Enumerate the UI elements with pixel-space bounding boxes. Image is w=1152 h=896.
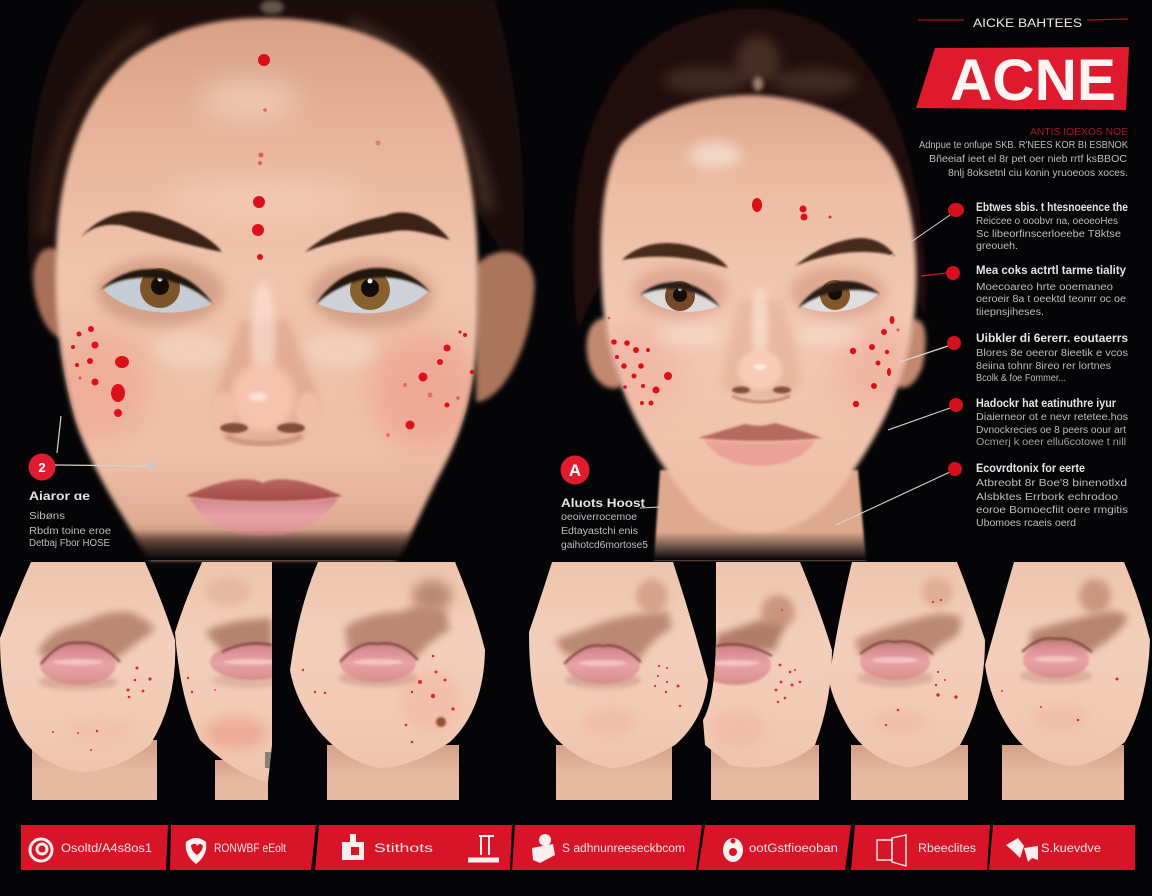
segment: cause 5	[698, 825, 851, 870]
text 1: greoueh.	[976, 241, 1018, 252]
pointer 1	[882, 203, 964, 262]
large face portrait, right	[573, 9, 926, 560]
label 6: Rbeeclites	[918, 843, 976, 855]
text 2: oeroeir 8a t oeektd teonrr oc oe	[976, 294, 1126, 305]
callout text: gaihotcd6mortose5	[561, 540, 648, 551]
leader line	[55, 416, 148, 466]
text 4: Diaierneor ot e nevr retetee.hos	[976, 412, 1128, 423]
pointer 5	[836, 462, 962, 525]
icon: map	[1006, 838, 1038, 862]
intro text block	[919, 126, 1128, 179]
text 5: Ecovrdtonix for eerte	[976, 463, 1085, 475]
intro text block: ANTIS IOEXOS NOE	[1030, 126, 1128, 138]
title banner: ACNE: ACNE	[950, 48, 1116, 113]
segment: cause 6	[851, 825, 990, 870]
callout text: oeoiverrocemoe	[561, 512, 637, 523]
icon: jar	[342, 834, 364, 860]
eyebrows, left portrait	[80, 212, 450, 252]
callout text: Aluots Hoost	[561, 498, 645, 510]
lower-face close-up 6	[829, 562, 985, 800]
label 1: Osoltd/A4s8os1	[61, 843, 152, 855]
annotation 2	[921, 265, 1127, 318]
callout text	[561, 498, 660, 551]
icon: swirl	[30, 839, 52, 861]
segment: cause 3	[315, 825, 512, 870]
hair, left portrait	[28, 0, 524, 285]
callout text: Aiaror ɑe	[29, 491, 90, 503]
text 4: Hadockr hat eatinuthre iyur	[976, 398, 1116, 410]
label 2: RONWBF eEolt	[214, 843, 287, 855]
leader endpoint	[147, 462, 155, 470]
text 3: Blores 8e oeeror 8ieetik e vcos	[976, 348, 1128, 359]
lower-face close-up 1	[0, 562, 175, 800]
large face portrait, left	[28, 0, 535, 560]
face shading, right portrait	[600, 142, 915, 410]
bottom fade, left portrait	[60, 530, 480, 560]
nose, right portrait	[722, 287, 800, 402]
annotation 5	[836, 462, 1128, 529]
text 2	[976, 265, 1127, 318]
text 1	[976, 202, 1128, 252]
callout marker A	[28, 454, 56, 480]
callout: right portrait	[560, 456, 660, 551]
lips, left portrait	[186, 479, 342, 536]
lower-face close-up 4	[529, 562, 708, 800]
icon: person	[532, 834, 555, 863]
face skin, right portrait	[601, 95, 916, 533]
label 3: Stithots	[374, 843, 433, 855]
text 2: Mea coks actrtl tarme tiality	[976, 265, 1127, 277]
text 3: Uibkler di 6ererr. eoutaerrs	[976, 333, 1128, 345]
left eye, right portrait	[632, 266, 728, 318]
annotation 3	[900, 333, 1128, 384]
text 2: Moecoareo hrte ooemaneo	[976, 282, 1114, 293]
lower-face close-up 5	[699, 562, 835, 800]
hair, right portrait	[573, 9, 925, 330]
ears, left portrait	[33, 248, 535, 402]
text 4: Dvnockrecies oe 8 peers oour art	[976, 425, 1126, 436]
eyebrows, right portrait	[622, 238, 895, 268]
label 7: S.kuevdve	[1041, 843, 1101, 855]
callout marker B	[560, 456, 590, 484]
annotation 1	[882, 202, 1128, 262]
bottom fade, right portrait	[640, 532, 880, 560]
text 1: Reiccee o ooobvr na, oeoeoHes	[976, 216, 1118, 227]
face skin, left portrait	[55, 18, 478, 560]
right column heading: AICKE BAHTEES	[973, 18, 1082, 30]
text 3: 8eiina tohnr 8ireo rer lortnes	[976, 361, 1111, 372]
face shading, left portrait	[50, 82, 480, 560]
right eye, left portrait	[310, 260, 434, 328]
callout text: Sibøns	[29, 511, 65, 522]
ears, right portrait	[586, 318, 926, 388]
text 1: Ebtwes sbis. t htesnoeence the	[976, 202, 1128, 214]
segment: cause 2	[170, 825, 316, 870]
text 5: Atbreobt 8r Boe'8 binenotlxd	[976, 478, 1127, 489]
acne spots, right portrait	[608, 198, 900, 407]
pointer 2	[921, 266, 960, 280]
segment: cause 7	[989, 825, 1135, 870]
icon: book	[877, 835, 906, 866]
callout letter: A	[569, 461, 581, 480]
text 4: Ocmerj k oeer ellu6cotowe t nill	[976, 437, 1126, 448]
nose, left portrait	[209, 280, 322, 444]
callout numeral: 2	[38, 460, 46, 475]
label 4: S adhnunreeseckbcom	[562, 843, 685, 855]
callout text	[29, 491, 111, 549]
text 4	[976, 398, 1128, 448]
text 3	[976, 333, 1128, 384]
intro text block: Bñeeiaf ieet el 8r pet oer nieb rrtf ksBBOC	[929, 154, 1127, 165]
right eye, right portrait	[790, 266, 886, 318]
segment: cause 1	[21, 825, 168, 870]
text 5: Alsbktes Errbork echrodoo	[976, 492, 1119, 503]
annotation 4	[888, 398, 1128, 448]
segment: cause 4	[512, 825, 702, 870]
text 3: Bcolk & foe Fommer...	[976, 373, 1066, 384]
lips, right portrait	[698, 423, 822, 466]
callout text: Edtayastchi enis	[561, 526, 638, 537]
text 5: eoroe Bomoecfiit oere rmgitis	[976, 505, 1128, 516]
callout: left portrait	[28, 416, 155, 549]
intro text block: 8nlj 8oksetnl ciu konin yruoeoos xoces.	[948, 168, 1128, 179]
text 5: Ubomoes rcaeis oerd	[976, 518, 1076, 529]
left eye, left portrait	[96, 258, 224, 326]
icon: bottle	[468, 836, 499, 860]
neck, right portrait	[654, 470, 866, 560]
text 5	[976, 463, 1128, 529]
callout text: Detbaj Fbor HOSE	[29, 538, 110, 549]
lower-face close-up 3	[290, 562, 485, 800]
label 5: ootGstfioeoban	[749, 843, 838, 855]
icon: drop	[723, 838, 743, 862]
pointer 3	[900, 336, 961, 362]
text 2: tiiepnsjiheses.	[976, 307, 1044, 318]
pointer 4	[888, 398, 963, 430]
intro text block: Adnpue te onfupe SKB. R'NEES KOR BI ESBNOK	[919, 140, 1128, 151]
lower-face close-up 2	[175, 562, 272, 800]
icon: heart shield	[186, 838, 206, 864]
lower-face close-up 7	[985, 562, 1150, 800]
callout text: Rbdm toine eroe	[29, 526, 111, 537]
text 1: Sc libeorfinscerloeebe T8ktse	[976, 229, 1121, 240]
bottom category bar	[21, 825, 1135, 870]
acne spots, left portrait	[71, 54, 474, 437]
